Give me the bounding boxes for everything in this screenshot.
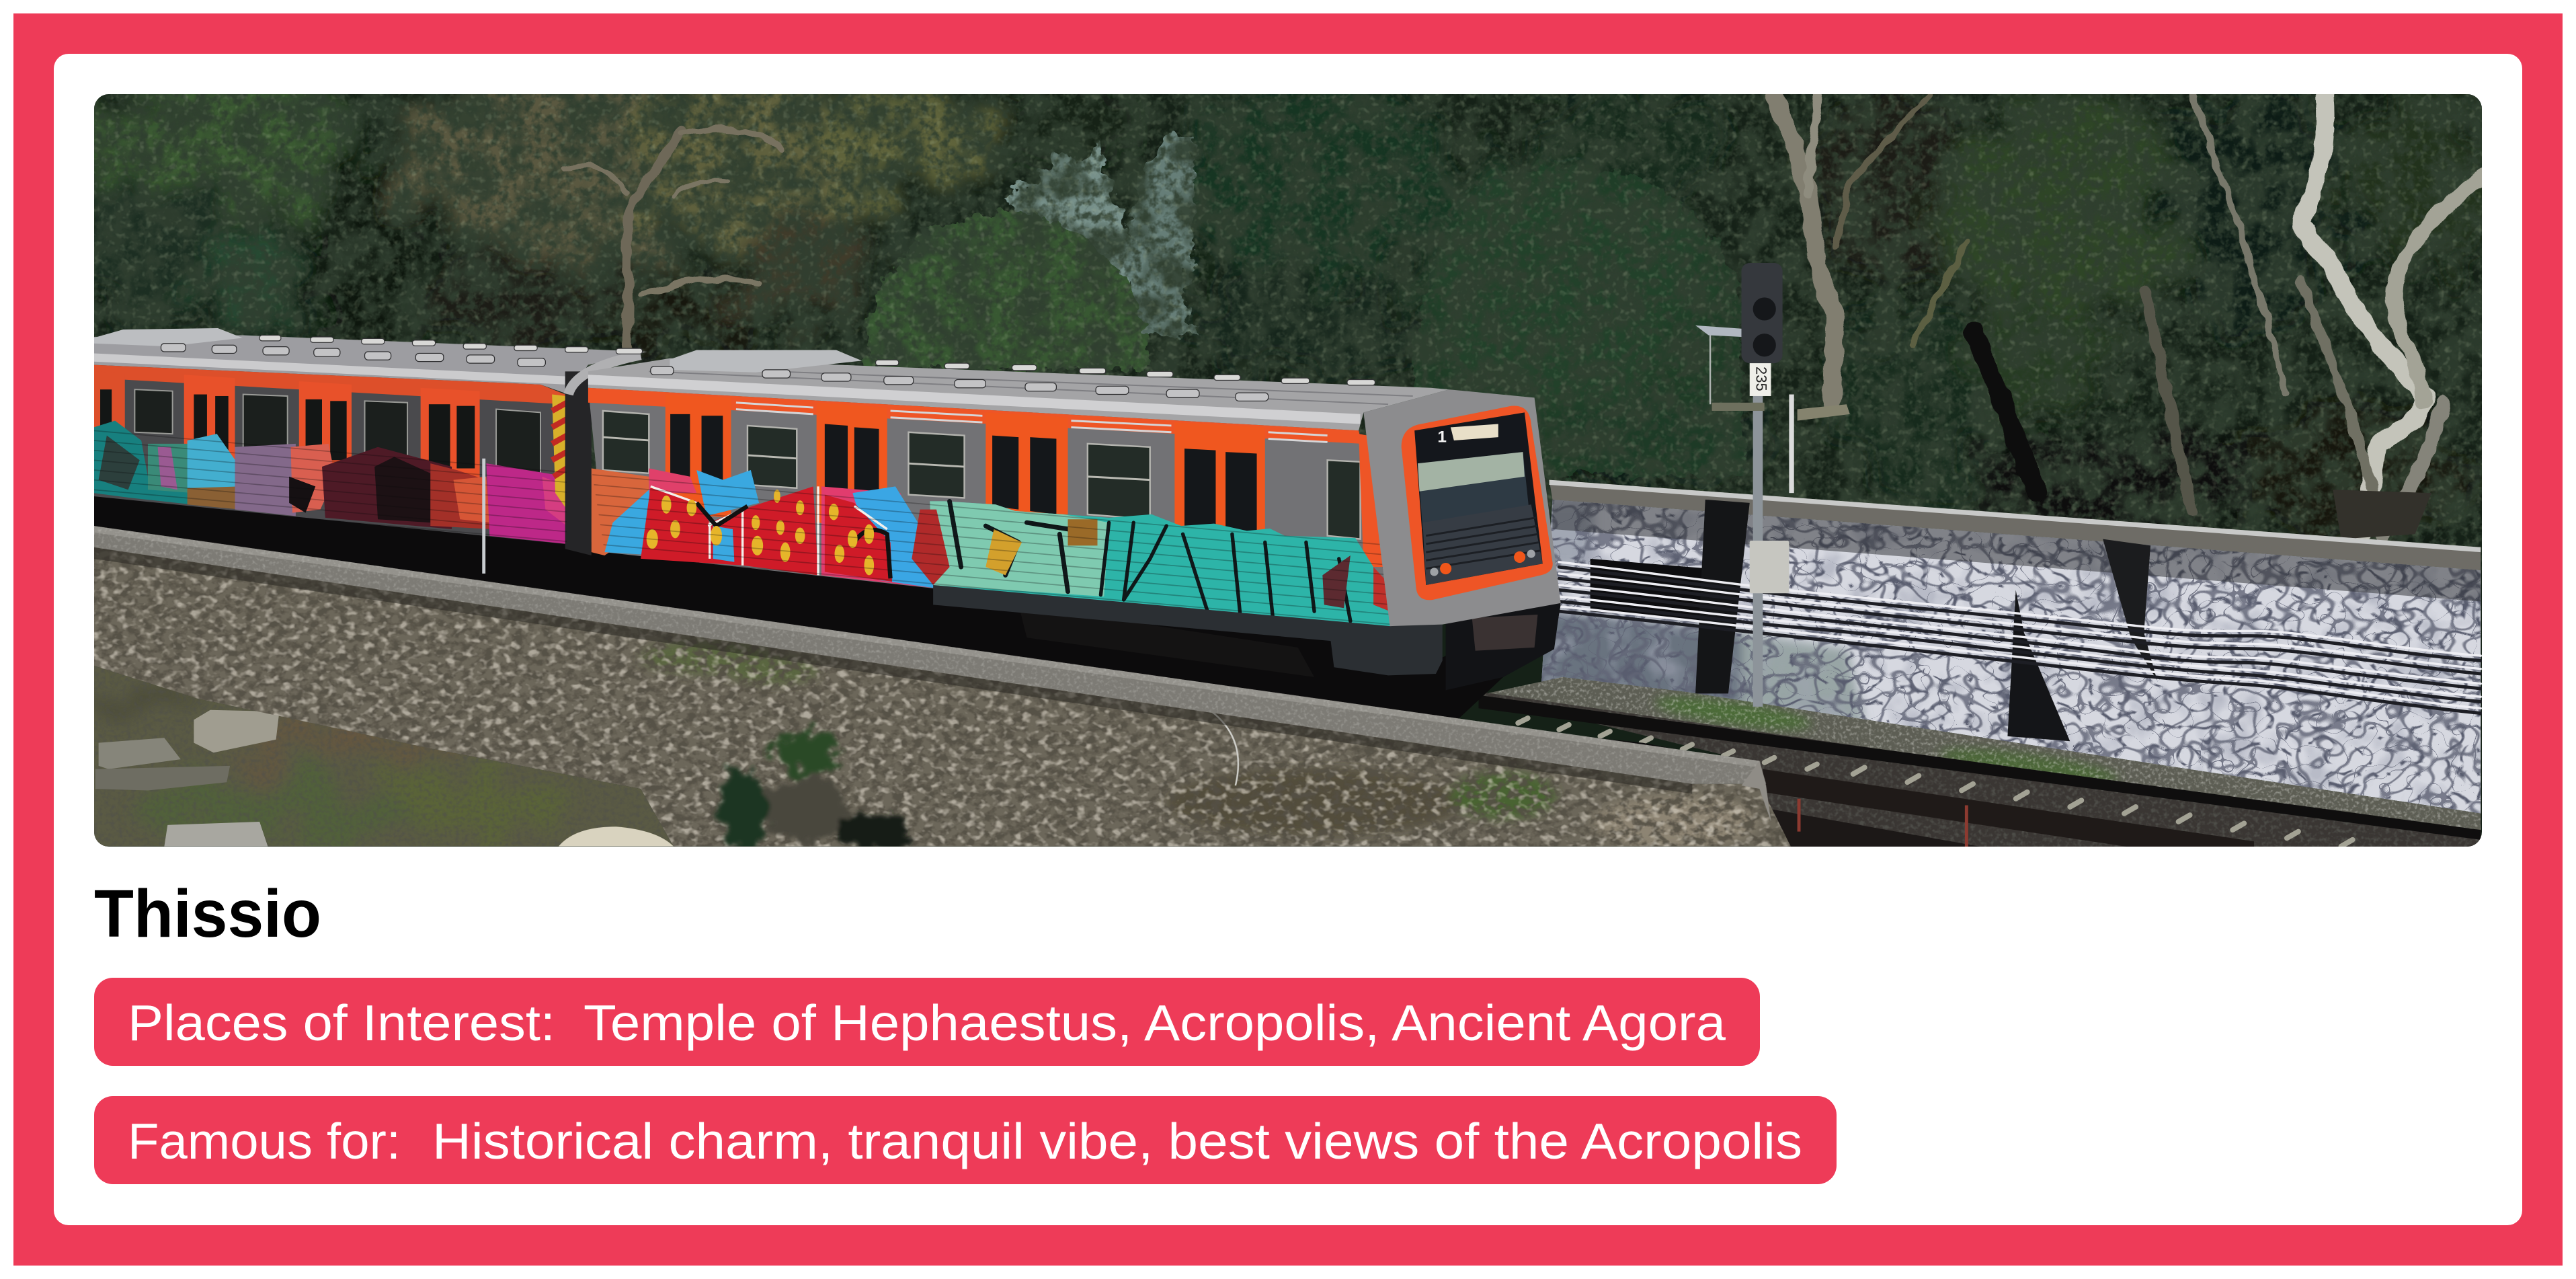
signal number plate text: 235 [1753,366,1770,391]
grass and ruins foreground [82,658,685,848]
dark undercarriage [93,490,1761,766]
front stone retaining wall [93,522,1794,855]
doors, rear carriage [93,371,125,493]
railway signal and pole [1695,263,1850,707]
graffiti yellow dots [647,490,874,575]
title: Thissio [94,876,321,952]
silver-green shrub [1006,132,1196,337]
doors, lead carriage [666,395,731,518]
tag: famous for [94,1096,1837,1184]
wall-mounted cables [1559,562,2481,713]
roof air-conditioning units and vents [93,328,1375,401]
door and side windows, rear carriage [134,389,540,473]
gravel bank and track bed [1443,666,2489,855]
lead carriage with cab [93,358,1561,675]
tag: places of interest [94,978,1760,1066]
green shrub [867,210,1150,370]
cab-side orange stripe [1359,434,1383,567]
pale rubble at wall base [559,826,674,847]
tree trunks and branches [565,95,2486,534]
lead carriage graffiti: red and blue section [592,469,936,588]
tag: places of interest: Temple of Hephaestus, Acropolis, Ancient Agora [583,995,1726,1051]
cab front [1363,389,1561,626]
tag: famous for: Historical charm, tranquil vibe, best views of the Acropolis [432,1113,1802,1169]
photo: graffiti metro train passing Thissio [66,69,2497,855]
cable on wall [1199,703,1238,785]
headlights [1440,563,1451,574]
ancient stone blocks [194,710,279,752]
shadow under coping [93,547,1692,793]
lower skirt [933,585,1443,675]
side windows, lead carriage [603,411,1361,539]
lead carriage graffiti: mint and teal lettering [912,501,1393,626]
tag: places of interest: Places of Interest: [128,995,555,1051]
tree shadows on wall [1591,559,1712,621]
hazard stripes [552,395,567,510]
back retaining wall [1528,480,2486,822]
door window slits [670,414,1257,534]
rear carriage [93,336,647,544]
louvre stripes [736,403,1328,442]
electrical box [1750,541,1789,593]
deep green tree mass [1413,164,1742,477]
body ridges across the graffiti [93,430,1393,625]
carriage gangway [565,371,592,555]
tree foliage backdrop [66,69,2497,570]
wall coping [93,526,1766,784]
destination sign [1451,424,1498,440]
tag: famous for: Famous for: [128,1113,401,1169]
thin trackside post [482,459,485,574]
cab front: 1 [1437,428,1447,446]
wall capstone [1549,480,2481,570]
rear carriage graffiti [93,421,192,504]
coping end stone [1742,761,1771,822]
